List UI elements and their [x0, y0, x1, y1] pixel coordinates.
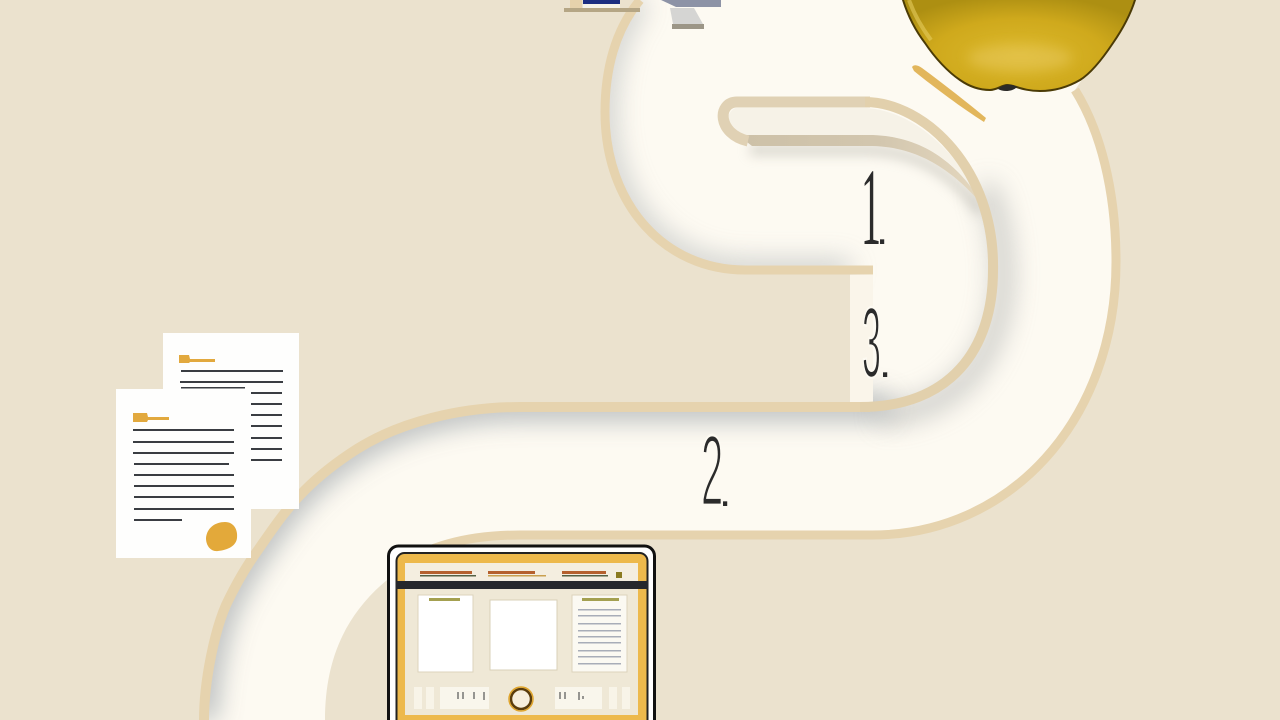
icon: golden apple: [903, 0, 1135, 91]
number 2: 2: [701, 416, 723, 527]
back document: [163, 333, 299, 509]
panel seam rectangle: [850, 275, 873, 403]
ribbon borders: [204, 0, 1116, 720]
icon: computer base fragment: [564, 0, 640, 12]
front document: [116, 389, 251, 558]
icon: monitor stand fragment: [661, 0, 721, 29]
number 1: .: [876, 205, 888, 254]
tablet header: [405, 563, 638, 581]
tablet right card: [572, 595, 627, 672]
winding ribbon path: [204, 0, 1135, 720]
number 2: .: [719, 467, 731, 516]
icon: tablet screen mockup: [388, 546, 654, 720]
tablet black bar: [396, 581, 648, 589]
number 3: .: [879, 338, 891, 387]
tablet center card: [490, 600, 557, 670]
icon: apple stick shadow: [912, 65, 986, 122]
number 3: [862, 286, 891, 398]
tablet left card: [418, 595, 473, 672]
tablet content area: [405, 589, 638, 715]
icon: document stack: [116, 333, 299, 558]
wax seal: [206, 522, 237, 551]
number 3: 3: [862, 286, 881, 398]
number 1: 1: [861, 146, 881, 268]
tongue fold of the ribbon: [728, 108, 985, 205]
tablet footer row: [414, 687, 630, 711]
